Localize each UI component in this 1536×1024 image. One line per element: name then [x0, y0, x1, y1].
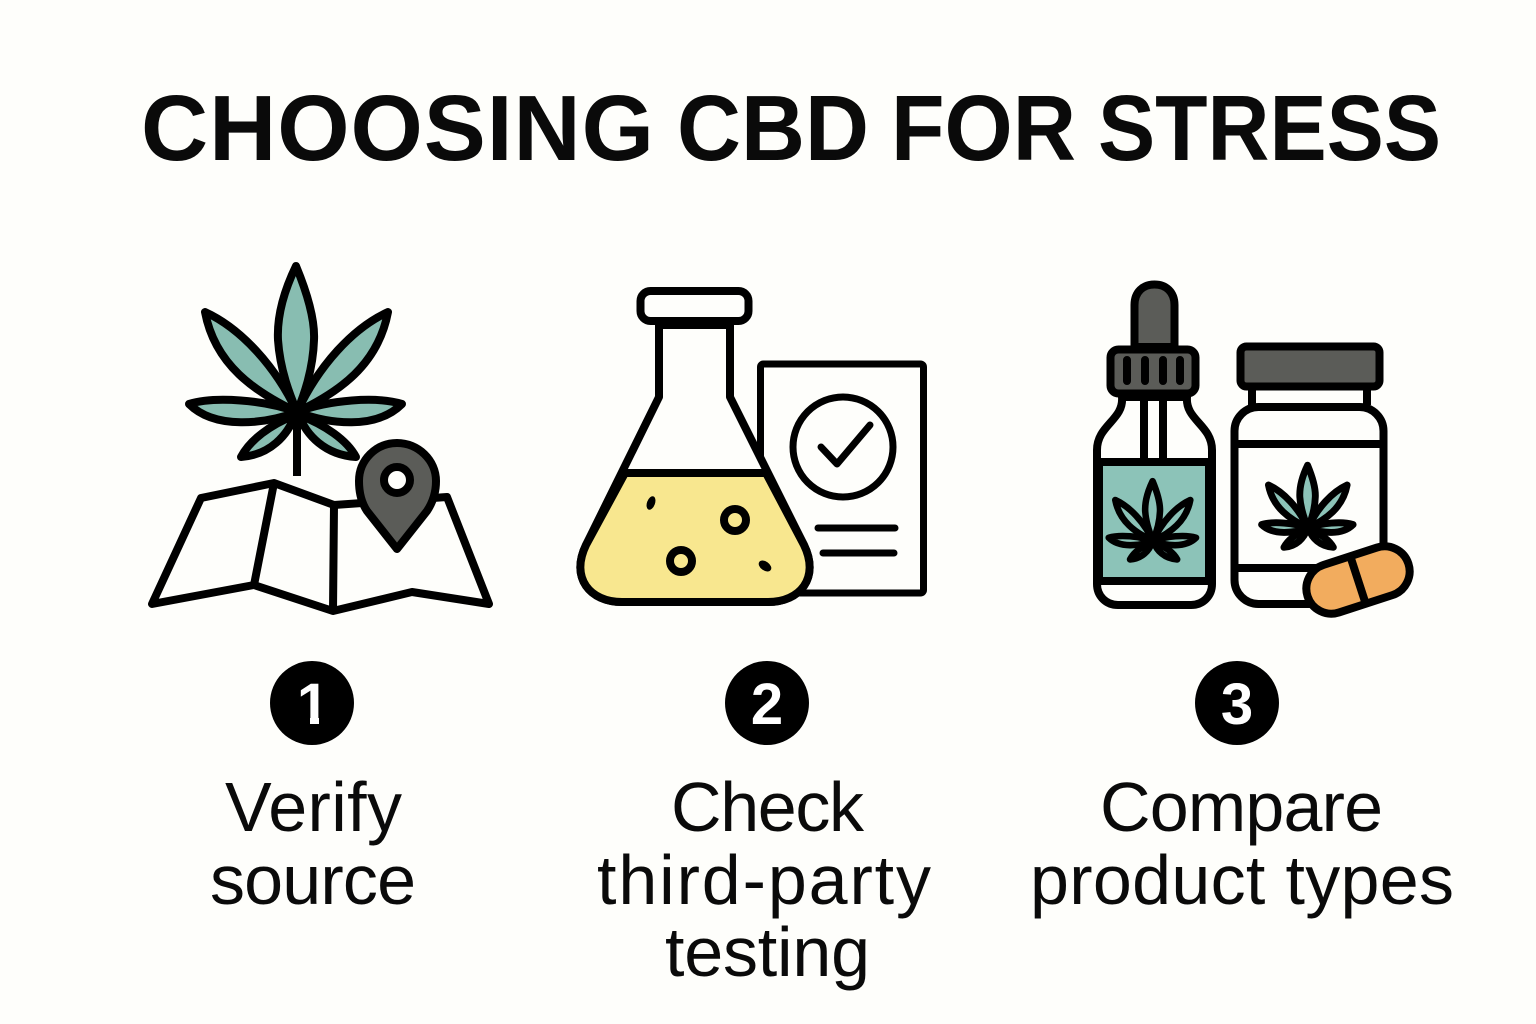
icon: small leaf on jar label	[1262, 465, 1353, 547]
label: verify source: source	[210, 841, 416, 919]
label: check third-party testing: third-party	[597, 841, 931, 919]
icon: dropper bottle	[1097, 284, 1212, 605]
label: check third-party testing	[597, 768, 931, 991]
number badge 2	[725, 661, 809, 745]
title: CHOOSING	[141, 76, 654, 180]
panel: step 3 product types	[1030, 284, 1454, 919]
label: verify source	[210, 768, 416, 919]
number badge 3	[1195, 661, 1279, 745]
title: STRESS	[1098, 76, 1441, 180]
number badge 2: 2	[751, 672, 783, 737]
label: check third-party testing: testing	[665, 913, 870, 991]
icon: location pin	[359, 443, 436, 549]
icon: folded map	[152, 483, 489, 611]
number badge 1	[270, 661, 354, 745]
title: FOR	[891, 76, 1076, 180]
label: compare product types: Compare	[1100, 768, 1383, 846]
label: compare product types	[1030, 768, 1454, 919]
number badge 1: 1	[297, 672, 329, 737]
title	[141, 76, 1441, 180]
icon: supplement jar	[1234, 346, 1384, 604]
icon: capsule	[1300, 540, 1416, 620]
label: compare product types: product types	[1030, 841, 1454, 919]
label: verify source: Verify	[225, 768, 402, 846]
number badge 3: 3	[1221, 672, 1253, 737]
panel: step 2 third-party testing	[580, 291, 931, 991]
icon: flask with liquid	[580, 291, 810, 602]
title: CBD	[677, 76, 869, 180]
icon: cannabis leaf	[189, 266, 402, 476]
icon: test certificate	[760, 364, 924, 593]
panel: step 1 verify source	[152, 266, 489, 919]
label: check third-party testing: Check	[671, 768, 865, 846]
icon: small leaf on bottle label	[1109, 481, 1196, 559]
